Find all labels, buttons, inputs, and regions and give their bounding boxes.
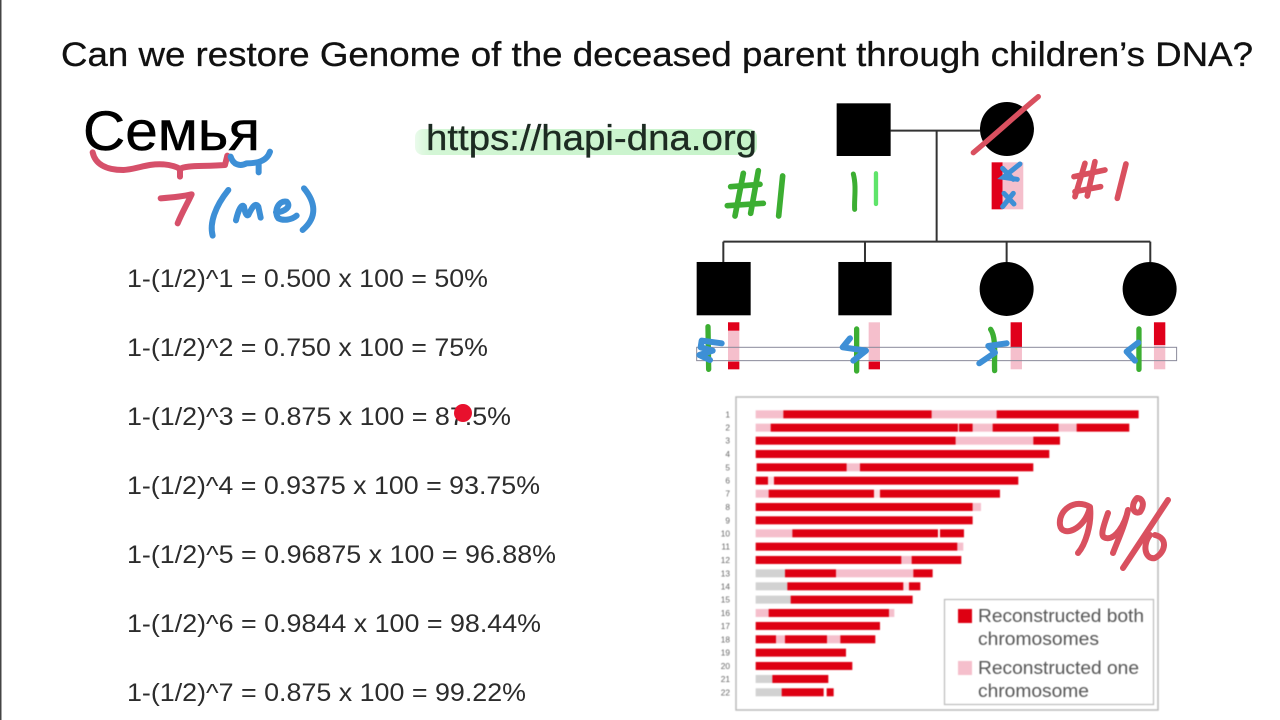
legend swatch: one [958,661,972,675]
formula list [127,265,556,707]
formula list: 1-(1/2)^5 = 0.96875 x 100 = 96.88% [127,541,556,569]
children blue scribbles [699,338,1138,363]
chromosome axis labels: 22 [721,687,730,697]
chromosome reconstruction chart [721,397,1158,710]
chromosome axis labels [721,409,730,697]
formula list: 1-(1/2)^3 = 0.875 x 100 = 87.5% [127,403,511,431]
chromosome axis labels: 7 [725,489,730,499]
laser pointer dot [454,404,472,422]
daughter 2 symbol [1123,262,1177,316]
annotation: red brace and 7 [93,152,227,223]
red #1 [1074,162,1126,198]
legend swatch: both [958,609,972,623]
formula list: 1-(1/2)^2 = 0.750 x 100 = 75% [127,334,488,362]
word: Семья with handwritten annotation: Семья [83,99,260,162]
chromosome axis labels: 15 [721,595,730,605]
chromosome axis labels: 3 [725,436,730,446]
deceased mother symbol [973,97,1038,156]
handwritten 94% [1060,498,1168,568]
word: Семья with handwritten annotation [83,99,313,236]
chromosome axis labels: 1 [725,409,730,419]
chromosome axis labels: 19 [721,648,730,658]
chromosome axis labels: 2 [725,423,730,433]
chromosome axis labels: 6 [725,476,730,486]
formula list: 1-(1/2)^7 = 0.875 x 100 = 99.22% [127,679,526,707]
legend labels: Reconstructed both [978,605,1144,626]
chromosome axis labels: 10 [721,528,730,538]
father green chromosome strokes [853,173,876,209]
highlighted region box [697,347,1177,361]
chromosome axis labels: 20 [721,661,730,671]
father symbol [837,103,891,156]
formula list: 1-(1/2)^6 = 0.9844 x 100 = 98.44% [127,610,541,638]
chromosome axis labels: 21 [721,674,730,684]
son 2 symbol [838,262,892,315]
mother chromosomes with blue crosses [992,162,1023,209]
chromosome bars [721,409,1139,697]
url with green highlight: https://hapi-dna.org [426,117,757,158]
children red and pink chromosomes [728,322,1165,369]
son 1 symbol [697,262,751,315]
chart frame [736,397,1158,710]
chromosome axis labels: 8 [725,502,730,512]
chromosome axis labels: 13 [721,568,730,578]
legend [944,600,1154,704]
chromosome axis labels: 18 [721,634,730,644]
annotation: blue stroke and (me) [212,152,313,236]
legend labels [978,605,1144,701]
formula list: 1-(1/2)^1 = 0.500 x 100 = 50% [127,265,488,293]
children green chromosome strokes [708,327,1139,371]
pedigree connecting lines [723,131,1150,262]
chromosome axis labels: 9 [725,515,730,525]
pedigree diagram [697,97,1177,371]
legend labels: Reconstructed one [978,657,1139,678]
green #1 [727,171,783,216]
chromosome axis labels: 16 [721,608,730,618]
chromosome axis labels: 12 [721,555,730,565]
formula list: 1-(1/2)^4 = 0.9375 x 100 = 93.75% [127,472,540,500]
chromosome axis labels: 4 [725,449,730,459]
chromosome axis labels: 14 [721,581,730,591]
daughter 1 symbol [980,262,1034,316]
legend labels: chromosome [978,680,1089,701]
chromosome axis labels: 5 [725,462,730,472]
chromosome axis labels: 17 [721,621,730,631]
chromosome axis labels: 11 [721,542,730,552]
title: Can we restore Genome of the deceased parent through children’s DNA? [61,36,1253,74]
legend labels: chromosomes [978,628,1099,649]
